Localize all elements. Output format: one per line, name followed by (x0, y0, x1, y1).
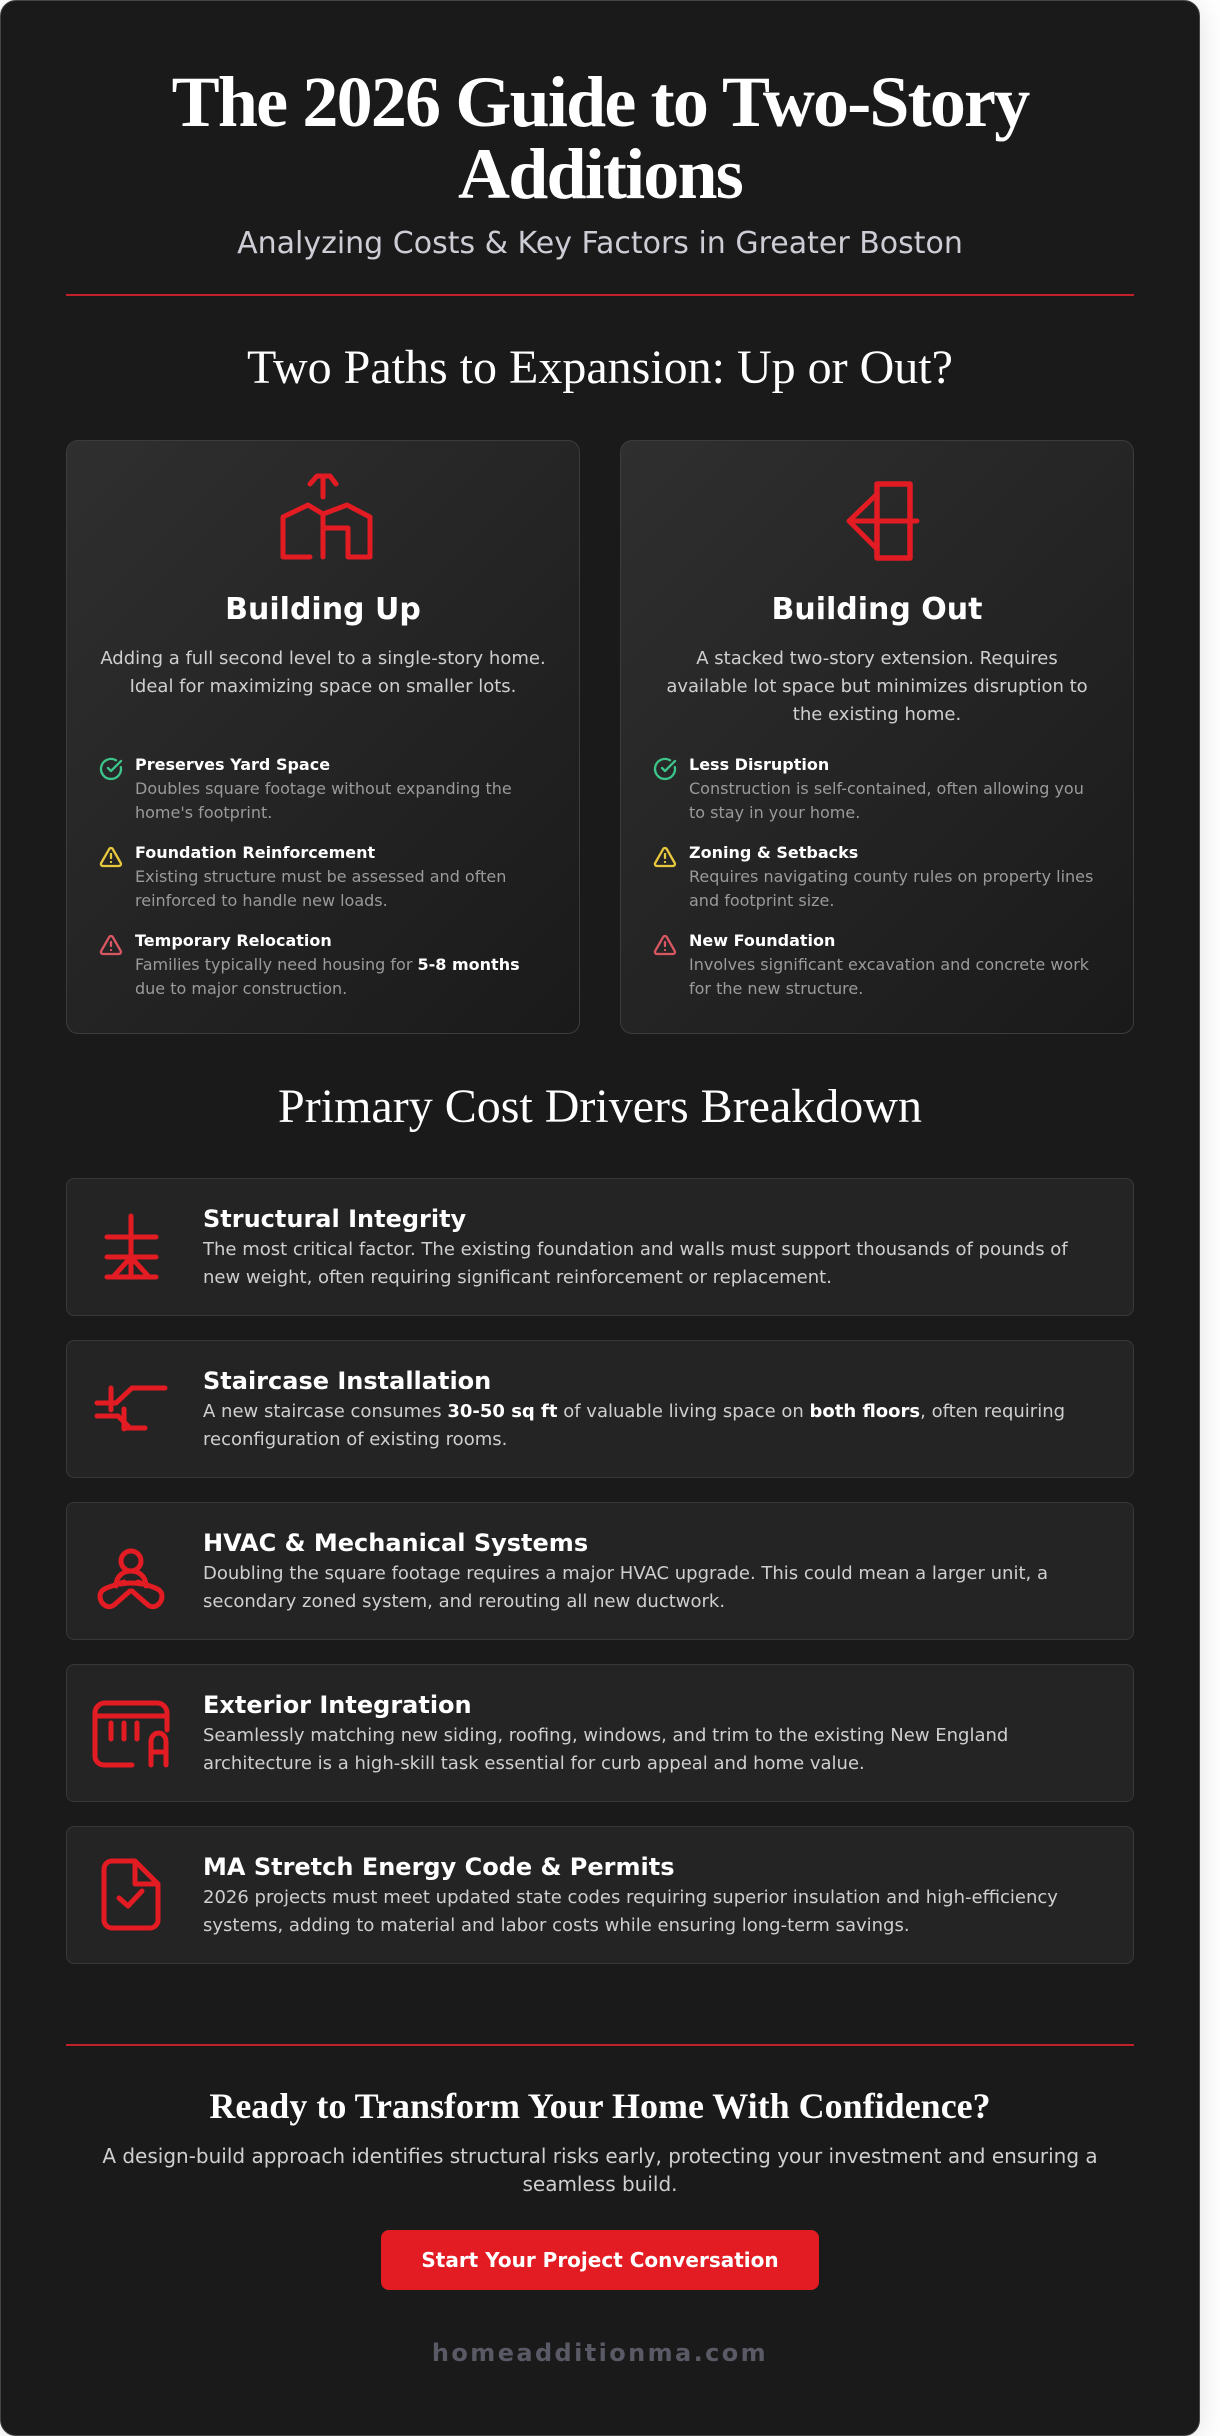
button: Start Your Project Conversation (421, 2248, 779, 2272)
text: hvac (203, 1563, 1048, 1612)
description: building out (666, 648, 1088, 725)
text: new foundation: Involves significant excavation and concrete work (689, 954, 1089, 974)
icon: yellow warning (654, 846, 676, 868)
text: new foundation: New Foundation (689, 930, 835, 950)
icon: green check (654, 758, 676, 780)
button (381, 2230, 819, 2290)
section heading: cost drivers: Primary Cost Drivers Breakdown (278, 1080, 922, 1133)
icon: yellow warning (100, 846, 122, 868)
subtitle: Analyzing Costs & Key Factors in Greater Boston (237, 226, 963, 261)
text: temporary relocation: Temporary Relocation (135, 930, 332, 950)
text: preserves yard space (135, 754, 512, 822)
text: staircase installation (203, 1401, 1065, 1450)
footer divider (66, 2044, 1134, 2046)
row: staircase installation (66, 1340, 1134, 1478)
text: stretch code (203, 1887, 1058, 1936)
icon: hvac person (98, 1548, 164, 1610)
title: The 2026 Guide to Two-Story (172, 62, 1028, 142)
text: structural integrity (202, 1239, 1068, 1288)
description: building up (100, 648, 546, 697)
call to action text: A design-build approach identifies structural risks early, protecting your investment and ensuring a (102, 2144, 1098, 2168)
text: preserves yard space: home's footprint. (135, 802, 272, 822)
call to action text (102, 2144, 1098, 2196)
text: temporary relocation (135, 930, 520, 998)
text: hvac: secondary zoned system, and rerouting all new ductwork. (203, 1591, 725, 1612)
row: exterior integration (66, 1664, 1134, 1802)
text: less disruption: to stay in your home. (689, 802, 860, 822)
text: foundation reinforcement: Foundation Reinforcement (135, 842, 375, 862)
text: zoning and setbacks: Requires navigating county rules on property lines (689, 866, 1093, 886)
row: hvac (66, 1502, 1134, 1640)
text: hvac: Doubling the square footage requires a major HVAC upgrade. This could mean a larger unit, a (203, 1563, 1048, 1584)
panel: building out (620, 440, 1134, 1034)
text: foundation reinforcement: Existing structure must be assessed and often (135, 866, 506, 886)
heading: hvac: HVAC & Mechanical Systems (203, 1529, 588, 1557)
description: building out: the existing home. (793, 704, 961, 725)
text: zoning and setbacks: and footprint size. (689, 890, 834, 910)
text: less disruption: Less Disruption (689, 754, 829, 774)
heading: structural integrity: Structural Integrity (203, 1205, 466, 1233)
item: less disruption (654, 754, 1084, 822)
title (172, 62, 1030, 214)
heading divider (66, 294, 1134, 296)
row: stretch code (66, 1826, 1134, 1964)
heading: exterior integration: Exterior Integration (203, 1691, 472, 1719)
icon: staircase (94, 1386, 168, 1432)
heading: building up: Building Up (225, 592, 421, 627)
description: building out: available lot space but minimizes disruption to (666, 676, 1088, 697)
text: foundation reinforcement: reinforced to handle new loads. (135, 890, 388, 910)
icon: exterior facade (92, 1700, 170, 1768)
text: staircase installation: A new staircase consumes 30-50 sq ft of valuable living space on both floors, often requiring (203, 1401, 1065, 1422)
item: temporary relocation (100, 930, 520, 998)
text: exterior integration: architecture is a high-skill task essential for curb appeal and home value. (203, 1753, 865, 1774)
heading: staircase installation: Staircase Installation (203, 1367, 491, 1395)
call to action heading: Ready to Transform Your Home With Confidence? (209, 2086, 991, 2126)
text: structural integrity: The most critical factor. The existing foundation and walls must support thousands of pounds of (203, 1239, 1068, 1260)
description: building up: Adding a full second level to a single-story home. (100, 648, 546, 669)
text: staircase installation: reconfiguration of existing rooms. (203, 1429, 507, 1450)
call to action text: seamless build. (522, 2172, 678, 2196)
description: building up: Ideal for maximizing space on smaller lots. (130, 676, 516, 697)
panel: building up (66, 440, 580, 1034)
text: exterior integration (203, 1725, 1008, 1774)
item: zoning and setbacks (654, 842, 1093, 910)
text: preserves yard space: Doubles square footage without expanding the (135, 778, 512, 798)
item: preserves yard space (100, 754, 512, 822)
item: new foundation (654, 930, 1089, 998)
icon: green check (100, 758, 122, 780)
icon: house extension (846, 481, 920, 561)
item: foundation reinforcement (100, 842, 506, 910)
text: temporary relocation: due to major construction. (135, 978, 347, 998)
website: homeadditionma.com (432, 2339, 768, 2367)
text: new foundation (689, 930, 1089, 998)
heading: building out: Building Out (771, 592, 983, 627)
text: foundation reinforcement (135, 842, 506, 910)
text: zoning and setbacks (689, 842, 1093, 910)
text: structural integrity: new weight, often requiring significant reinforcement or replacement. (203, 1267, 832, 1288)
text: exterior integration: Seamlessly matching new siding, roofing, windows, and trim to the existing New England (203, 1725, 1008, 1746)
text: less disruption (689, 754, 1084, 822)
row: structural integrity (66, 1178, 1134, 1316)
title: Additions (458, 134, 742, 214)
icon: red warning (654, 934, 676, 956)
text: new foundation: for the new structure. (689, 978, 863, 998)
text: temporary relocation: Families typically need housing for 5-8 months (135, 954, 520, 974)
text: preserves yard space: Preserves Yard Space (135, 754, 330, 774)
icon: red warning (100, 934, 122, 956)
text: less disruption: Construction is self-contained, often allowing you (689, 778, 1084, 798)
description: building out: A stacked two-story extension. Requires (696, 648, 1058, 669)
text: stretch code: 2026 projects must meet updated state codes requiring superior insulation and high-efficiency (203, 1887, 1058, 1908)
text: zoning and setbacks: Zoning & Setbacks (689, 842, 858, 862)
icon: structural beam (104, 1214, 158, 1280)
text: stretch code: systems, adding to material and labor costs while ensuring long-term savings. (203, 1915, 910, 1936)
icon: document check (102, 1858, 160, 1930)
icon: house with up arrow (280, 474, 372, 560)
heading: stretch code: MA Stretch Energy Code & Permits (203, 1853, 674, 1881)
section heading: two paths: Two Paths to Expansion: Up or Out? (247, 341, 953, 394)
